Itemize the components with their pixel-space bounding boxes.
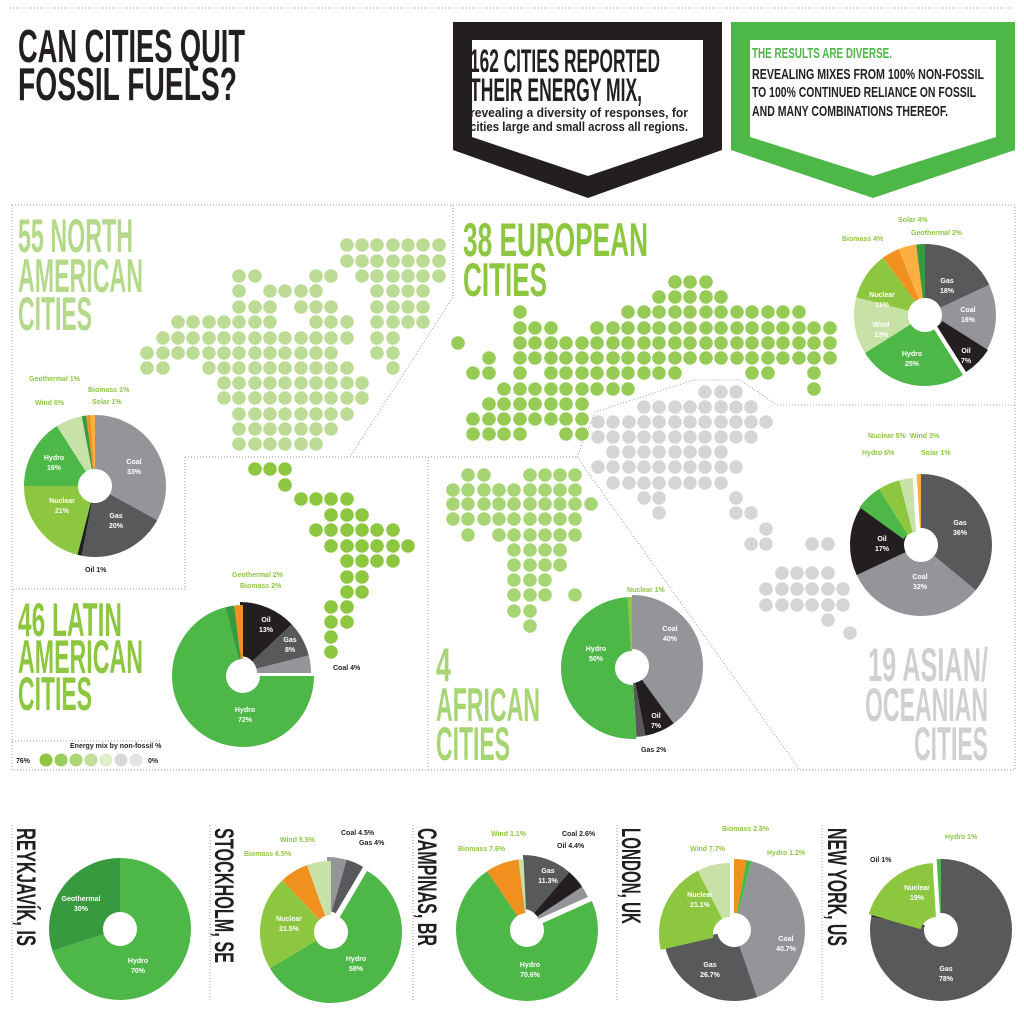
pie: europe: Coal: [960, 307, 976, 314]
pie: latin america: Gas: [283, 637, 297, 644]
pie: north america: Biomass 1%: [88, 387, 130, 394]
city: london: LONDON, UK: [616, 828, 646, 924]
pie: africa: Hydro: [586, 646, 606, 653]
callout: 162 cities shield: revealing a diversity of responses, for: [470, 105, 688, 120]
callout: results are diverse shield: AND MANY COMBINATIONS THEREOF.: [752, 103, 948, 120]
pie: north america: Gas: [109, 513, 123, 520]
city: campinas: Hydro: [520, 962, 540, 969]
city: london: [616, 826, 806, 979]
heading: europe: [463, 213, 648, 306]
pie: africa: 50%: [589, 656, 604, 663]
city: new york: NEW YORK, US: [822, 828, 852, 946]
city: campinas: 11.3%: [538, 878, 559, 885]
city: stockholm: Coal 4.5%: [341, 830, 375, 837]
pie: asia oceania: 36%: [953, 530, 968, 537]
city: stockholm: Biomass 6.5%: [244, 851, 292, 858]
pie: europe: 13%: [874, 332, 889, 339]
pie: europe: Wind: [872, 322, 890, 329]
pie: latin america: 8%: [285, 647, 296, 654]
map: latin america dots: [248, 462, 415, 659]
city: stockholm: Nuclear: [276, 916, 302, 923]
city: stockholm: Gas 4%: [359, 840, 385, 847]
city: campinas: [412, 828, 596, 979]
city: new york: [822, 828, 985, 983]
pie: north america: 16%: [47, 465, 62, 472]
pie: africa: Nuclear 1%: [627, 587, 666, 594]
pie: latin america: 72%: [238, 717, 253, 724]
city: reykjavik: REYKJAVÍK, IS: [11, 828, 42, 946]
legend: energy mix by non-fossil %: 76%: [16, 758, 31, 765]
pie: asia oceania: Coal: [912, 574, 928, 581]
text: AMERICAN: [18, 249, 143, 302]
title: [18, 20, 245, 110]
city: new york: Gas: [939, 966, 953, 973]
pie: europe: Oil: [961, 348, 971, 355]
city: london: 26.7%: [700, 972, 721, 979]
callout: 162 cities shield: [453, 22, 722, 198]
heading: europe: 38 EUROPEAN: [463, 213, 648, 266]
city: new york: Oil 1%: [870, 857, 892, 864]
callout: results are diverse shield: [731, 22, 1015, 198]
map: north america dots: [140, 238, 446, 451]
legend: energy mix by non-fossil %: Energy mix by non-fossil %: [70, 743, 162, 750]
pie: latin america: [196, 572, 361, 724]
text: AFRICAN: [436, 678, 540, 731]
pie: europe: Gas: [940, 278, 954, 285]
pie: asia oceania: Hydro 6%: [862, 450, 895, 457]
pie: asia oceania: Oil: [877, 536, 887, 543]
pie: latin america: Hydro: [235, 707, 255, 714]
pie: north america: Oil 1%: [85, 567, 107, 574]
pie: north america: Solar 1%: [92, 399, 122, 406]
callout: 162 cities shield: THEIR ENERGY MIX,: [470, 72, 642, 108]
pie: latin america: Coal 4%: [333, 665, 361, 672]
pie: europe: Solar 4%: [898, 217, 928, 224]
heading: north america: [18, 209, 143, 340]
pie: asia oceania: Wind 3%: [910, 433, 940, 440]
heading: asia oceania: [865, 638, 988, 770]
pie: europe: 25%: [905, 361, 920, 368]
callout: 162 cities shield: cities large and small across all regions.: [470, 119, 688, 134]
title: FOSSIL FUELS?: [18, 58, 237, 110]
title: CAN CITIES QUIT: [18, 20, 245, 72]
pie: europe: Biomass 4%: [842, 236, 884, 243]
heading: africa: CITIES: [436, 717, 510, 770]
heading: north america: CITIES: [18, 287, 92, 340]
city: campinas: CAMPINAS, BR: [412, 828, 442, 946]
city: stockholm: Hydro: [346, 956, 366, 963]
city: new york: Hydro 1%: [945, 834, 978, 841]
pie: europe: 7%: [961, 358, 972, 365]
pie: latin america: 13%: [259, 627, 274, 634]
city: london: Biomass 2.8%: [722, 826, 770, 833]
pie: europe: 11%: [875, 302, 890, 309]
city: london: Nuclear: [687, 892, 713, 899]
city: london: Gas: [703, 962, 717, 969]
heading: africa: [436, 638, 540, 770]
pie: north america: Geothermal 1%: [29, 376, 81, 383]
pie: latin america: Geothermal 2%: [232, 572, 284, 579]
city: campinas: 70.6%: [520, 972, 541, 979]
legend: energy mix by non-fossil %: [16, 743, 162, 766]
city: stockholm: Wind 5.5%: [280, 837, 316, 844]
map: europe dots: [451, 275, 837, 441]
city: reykjavik: Hydro: [128, 958, 148, 965]
pie: europe: [842, 217, 976, 368]
pie: europe: Geothermal 2%: [911, 230, 963, 237]
pie: north america: 21%: [55, 508, 70, 515]
city: london: Coal: [778, 936, 794, 943]
pie: north america: 20%: [109, 523, 124, 530]
callout: 162 cities shield: 162 CITIES REPORTED: [470, 43, 660, 79]
city: stockholm: 21.5%: [279, 926, 300, 933]
pie: north america: Wind 6%: [35, 400, 65, 407]
city: london: 40.7%: [776, 946, 797, 953]
callout: results are diverse shield: THE RESULTS ARE DIVERSE.: [752, 45, 892, 62]
legend: energy mix by non-fossil %: 0%: [148, 758, 159, 765]
city: new york: Nuclear: [904, 885, 930, 892]
pie: latin america: Biomass 2%: [240, 583, 282, 590]
heading: africa: 4: [436, 638, 451, 691]
map: asia/oceania dots: [591, 385, 857, 640]
pie: north america: Hydro: [44, 455, 64, 462]
heading: latin america: 46 LATIN: [18, 593, 122, 646]
city: reykjavik: [11, 828, 164, 975]
city: reykjavik: 30%: [74, 906, 89, 913]
pie: asia oceania: [862, 433, 968, 593]
pie: africa: [586, 587, 678, 754]
pie: asia oceania: 32%: [913, 584, 928, 591]
city: campinas: Biomass 7.6%: [458, 846, 506, 853]
city: london: 21.1%: [690, 902, 711, 909]
pie: asia oceania: Gas: [953, 520, 967, 527]
heading: latin america: [18, 593, 143, 720]
city: reykjavik: 70%: [131, 968, 146, 975]
pie: africa: 40%: [663, 636, 678, 643]
pie: africa: 7%: [651, 723, 662, 730]
pie: africa: Oil: [651, 713, 661, 720]
text: AMERICAN: [18, 630, 143, 683]
city: campinas: Gas: [541, 868, 555, 875]
city: new york: 19%: [910, 895, 925, 902]
map: africa dots: [446, 468, 598, 633]
pie: asia oceania: Solar 1%: [921, 450, 951, 457]
pie: asia oceania: 17%: [875, 546, 890, 553]
pie: north america: Coal: [126, 459, 142, 466]
pie: europe: Hydro: [902, 351, 922, 358]
pie: europe: 18%: [940, 288, 955, 295]
pie: north america: 33%: [127, 469, 142, 476]
pie: north america: [29, 376, 142, 574]
heading: latin america: CITIES: [18, 667, 92, 720]
pie: asia oceania: Nuclear 5%: [868, 433, 907, 440]
city: reykjavik: Geothermal: [62, 896, 101, 903]
heading: europe: CITIES: [463, 253, 547, 306]
city: london: Wind 7.7%: [690, 846, 726, 853]
city: campinas: Oil 4.4%: [557, 843, 585, 850]
city: campinas: Wind 1.1%: [491, 831, 527, 838]
city: stockholm: [209, 828, 385, 976]
pie: africa: Coal: [662, 626, 678, 633]
pie: europe: 16%: [961, 317, 976, 324]
pie: latin america: Oil: [261, 617, 271, 624]
pie: north america: Nuclear: [49, 498, 75, 505]
city: new york: 78%: [939, 976, 954, 983]
city: stockholm: 58%: [349, 966, 364, 973]
pie: africa: Gas 2%: [641, 747, 667, 754]
heading: north america: 55 NORTH: [18, 209, 133, 262]
city: london: Hydro 1.2%: [767, 850, 806, 857]
pie: europe: Nuclear: [869, 292, 895, 299]
city: campinas: Coal 2.6%: [562, 831, 596, 838]
